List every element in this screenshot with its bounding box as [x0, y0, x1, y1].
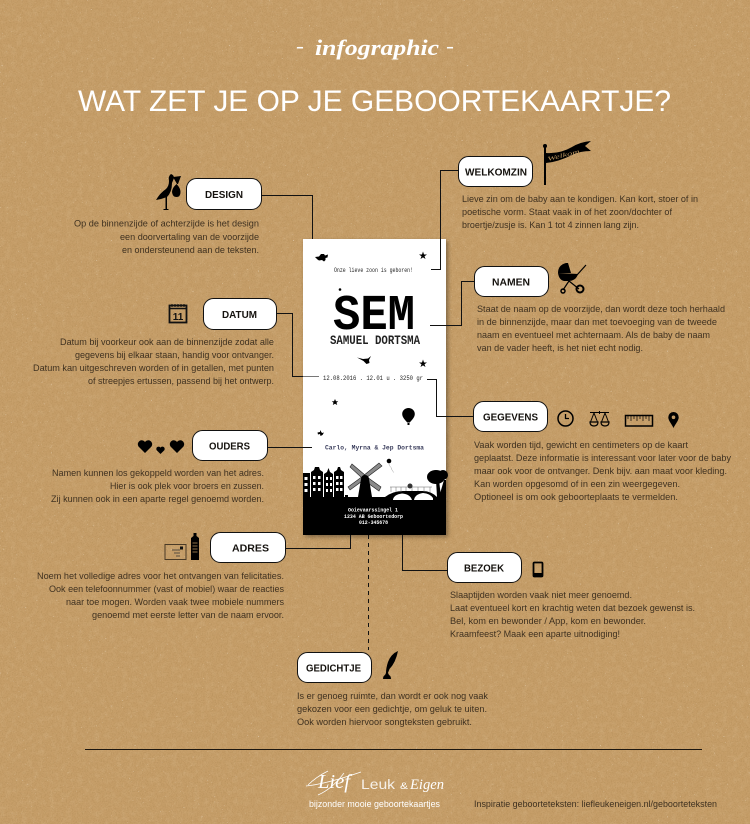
- icon: stork: [156, 174, 181, 210]
- icon: clock: [558, 411, 573, 426]
- card: parents: Carlo, Myrna & Jep Dortsma: [325, 444, 424, 452]
- text: adres: [37, 571, 284, 621]
- icon: scales: [590, 411, 609, 426]
- logo: Lief Leuk & Eigen: Eigen: [409, 777, 444, 793]
- icon: envelope: [165, 544, 186, 560]
- text: design: [74, 218, 259, 256]
- icon: welcome flag: Welkom: [547, 149, 582, 163]
- card: black skyline base: [303, 463, 448, 535]
- subtitle: infographic: [296, 35, 454, 60]
- panel: ouders: [51, 430, 268, 505]
- card: butterfly: [318, 430, 324, 436]
- text: bezoek: Bel, kom en bewonder / App, kom en bewonder.: [450, 616, 646, 627]
- card: windmill: [348, 463, 382, 497]
- label: gedichtje: [298, 652, 372, 682]
- text: gedichtje: [297, 691, 488, 728]
- text: gegevens: Optioneel is om ook geboorteplaats te vermelden.: [474, 492, 678, 503]
- connector: ouders: [268, 446, 312, 448]
- text: adres: Ook een telefoonnummer (vast of mobiel) waar de reacties: [49, 584, 284, 595]
- text: design: een doorvertaling van de voorzijde: [120, 232, 259, 243]
- icon: quill: [383, 651, 398, 679]
- text: gedichtje: Is er genoeg ruimte, dan wordt er ook nog vaak: [297, 691, 488, 702]
- text: datum: of streepjes ertussen, passend bij het ontwerp.: [88, 376, 274, 387]
- connector: welkomzin: [431, 170, 458, 270]
- card: address: [344, 508, 403, 526]
- connector: design: [262, 196, 312, 239]
- label: datum: [204, 298, 276, 330]
- label: gegevens: [474, 402, 548, 432]
- icon: phone: [533, 562, 543, 577]
- label: adres: [210, 532, 286, 562]
- text: ouders: Namen kunnen los gekoppeld worden van het adres.: [52, 468, 264, 479]
- label: ouders: OUDERS: [209, 442, 250, 452]
- label: welkomzin: WELKOMZIN: [465, 168, 527, 178]
- text: adres: genoemd met eerste letter van de naam ervoor.: [92, 610, 284, 621]
- text: datum: [33, 337, 274, 387]
- panel: namen: [474, 263, 725, 354]
- logo: Lief Leuk & Eigen: [306, 771, 444, 795]
- logo tagline: bijzonder mooie geboortekaartjes: [309, 799, 440, 809]
- card: small balloon: [387, 459, 394, 472]
- label: namen: [474, 266, 548, 296]
- text: namen: in de binnenzijde, maar dan met toevoeging van de tweede: [477, 317, 717, 328]
- label: ouders: [192, 430, 268, 460]
- card: full name: SAMUEL DORTSMA: [330, 333, 420, 348]
- text: bezoek: Slaaptijden worden vaak niet meer genoemd.: [450, 590, 632, 601]
- card: bird: [357, 356, 371, 364]
- logo: Lief Leuk & Eigen: Lief: [317, 771, 352, 793]
- text: gedichtje: gekozen voor een gedichtje, om geluk te uiten.: [297, 704, 487, 715]
- connector: datum: [277, 314, 319, 376]
- icon: bottle: [191, 533, 199, 560]
- card: bridge: [385, 484, 437, 500]
- text: bezoek: [450, 590, 695, 640]
- footer: source link: Inspiratie geboorteteksten: liefleukeneigen.nl/geboorteteksten: [474, 799, 717, 810]
- logo: Lief Leuk & Eigen: &: [400, 781, 408, 791]
- text: adres: naar toe mogen. Worden vaak twee mobiele nummers: [66, 597, 284, 608]
- card: decorative stars: [332, 252, 427, 405]
- connector: gedichtje: [368, 535, 370, 650]
- icon: calendar: [170, 304, 186, 323]
- label: datum: DATUM: [222, 310, 257, 321]
- label: welkomzin: [458, 156, 532, 186]
- text: datum: gegevens bij elkaar staan, handig voor ontvanger.: [75, 350, 274, 361]
- text: ouders: Hier is ook plek voor broers en zussen.: [110, 481, 264, 492]
- label: design: [186, 178, 262, 210]
- label: bezoek: [448, 552, 522, 582]
- panel: welkomzin: [458, 141, 698, 231]
- text: datum: Datum kan uitgeschreven worden of in getallen, met punten: [33, 363, 274, 374]
- text: adres: Noem het volledige adres voor het ontvangen van felicitaties.: [37, 571, 284, 582]
- card: welcome line: Onze lieve zoon is geboren!: [334, 267, 413, 274]
- logo: Lief Leuk & Eigen: Leuk: [361, 776, 396, 792]
- text: gegevens: Vaak worden tijd, gewicht en centimeters op de kaart: [474, 440, 688, 451]
- subtitle: infographic: -: [446, 39, 454, 54]
- text: namen: van de vader heeft, is het niet echt nodig.: [477, 343, 643, 354]
- connector: bezoek: [402, 535, 447, 570]
- panel: adres: [37, 532, 286, 621]
- panel: gedichtje: [297, 651, 488, 728]
- card: birth data: 12.08.2016 . 12.01 u . 3250 gr: [323, 375, 423, 382]
- card: canal houses: [303, 467, 348, 497]
- text: datum: Datum bij voorkeur ook aan de binnenzijde zodat alle: [60, 337, 274, 348]
- icon: calendar: 11: [173, 312, 184, 323]
- birth card: [303, 239, 448, 537]
- text: design: en ondersteunend aan de teksten.: [122, 245, 259, 256]
- text: gegevens: maar ook voor de ontvanger. Denk bijv. aan maat voor kleding.: [474, 466, 727, 477]
- card: address: Ooievaarssingel 1: [348, 508, 398, 514]
- text: welkomzin: broertje/zusje is. Kan 1 tot 4 zinnen lang zijn.: [462, 220, 639, 231]
- icon: ruler: [626, 416, 652, 426]
- label: gegevens: GEGEVENS: [483, 412, 538, 424]
- card: airplane: [315, 254, 328, 262]
- text: ouders: Zij kunnen ook in een aparte regel genoemd worden.: [51, 494, 264, 505]
- text: gegevens: [474, 440, 731, 503]
- card: address: 1234 AB Geboortedorp: [344, 514, 403, 520]
- title: WAT ZET JE OP JE GEBOORTEKAARTJE?: [78, 85, 671, 118]
- text: gegevens: Kan worden opgesomd of in een zin weergegeven.: [474, 479, 680, 490]
- card: balloon: [402, 408, 415, 425]
- text: gegevens: geplaatst. Deze informatie is interessant voor later voor de baby: [474, 453, 731, 464]
- panel: datum: [33, 298, 276, 387]
- text: namen: Staat de naam op de voorzijde, dan wordt deze toch herhaald: [477, 304, 725, 315]
- card: first name: SEM: [333, 288, 415, 345]
- connector: namen: [430, 282, 474, 326]
- text: welkomzin: Lieve zin om de baby aan te kondigen. Kan kort, stoer of in: [462, 194, 698, 205]
- icon: hearts: [138, 440, 184, 454]
- card: address: 012-345678: [359, 520, 388, 526]
- text: welkomzin: poetische vorm. Staat vaak in of het zoon/dochter of: [462, 207, 672, 218]
- text: bezoek: Laat eventueel kort en krachtig weten dat bezoek gewenst is.: [450, 603, 695, 614]
- panel: bezoek: [448, 552, 695, 640]
- icon: pram: [558, 263, 586, 293]
- card: tree: [427, 470, 448, 497]
- text: namen: naam en eventueel met achternaam. Als de baby de naam: [477, 330, 710, 341]
- text: welkomzin: [462, 194, 698, 231]
- label: bezoek: BEZOEK: [464, 564, 505, 574]
- icon: location pin: [668, 412, 679, 428]
- text: namen: [477, 304, 725, 354]
- label: design: DESIGN: [205, 190, 243, 201]
- panel: design: [74, 174, 262, 256]
- text: bezoek: Kraamfeest? Maak een aparte uitnodiging!: [450, 629, 620, 640]
- text: ouders: [51, 468, 264, 505]
- icon: welcome flag: [543, 141, 591, 185]
- connector: gegevens: [427, 380, 473, 416]
- text: gedichtje: Ook worden hiervoor songteksten gebruikt.: [297, 717, 472, 728]
- label: gedichtje: GEDICHTJE: [306, 664, 361, 674]
- text: design: Op de binnenzijde of achterzijde is het design: [74, 218, 259, 230]
- subtitle: infographic: infographic: [315, 35, 439, 60]
- connector: adres: [286, 535, 350, 548]
- panel: gegevens: [474, 402, 731, 503]
- subtitle: infographic: -: [296, 39, 304, 54]
- label: adres: ADRES: [232, 544, 269, 554]
- label: namen: NAMEN: [492, 278, 530, 288]
